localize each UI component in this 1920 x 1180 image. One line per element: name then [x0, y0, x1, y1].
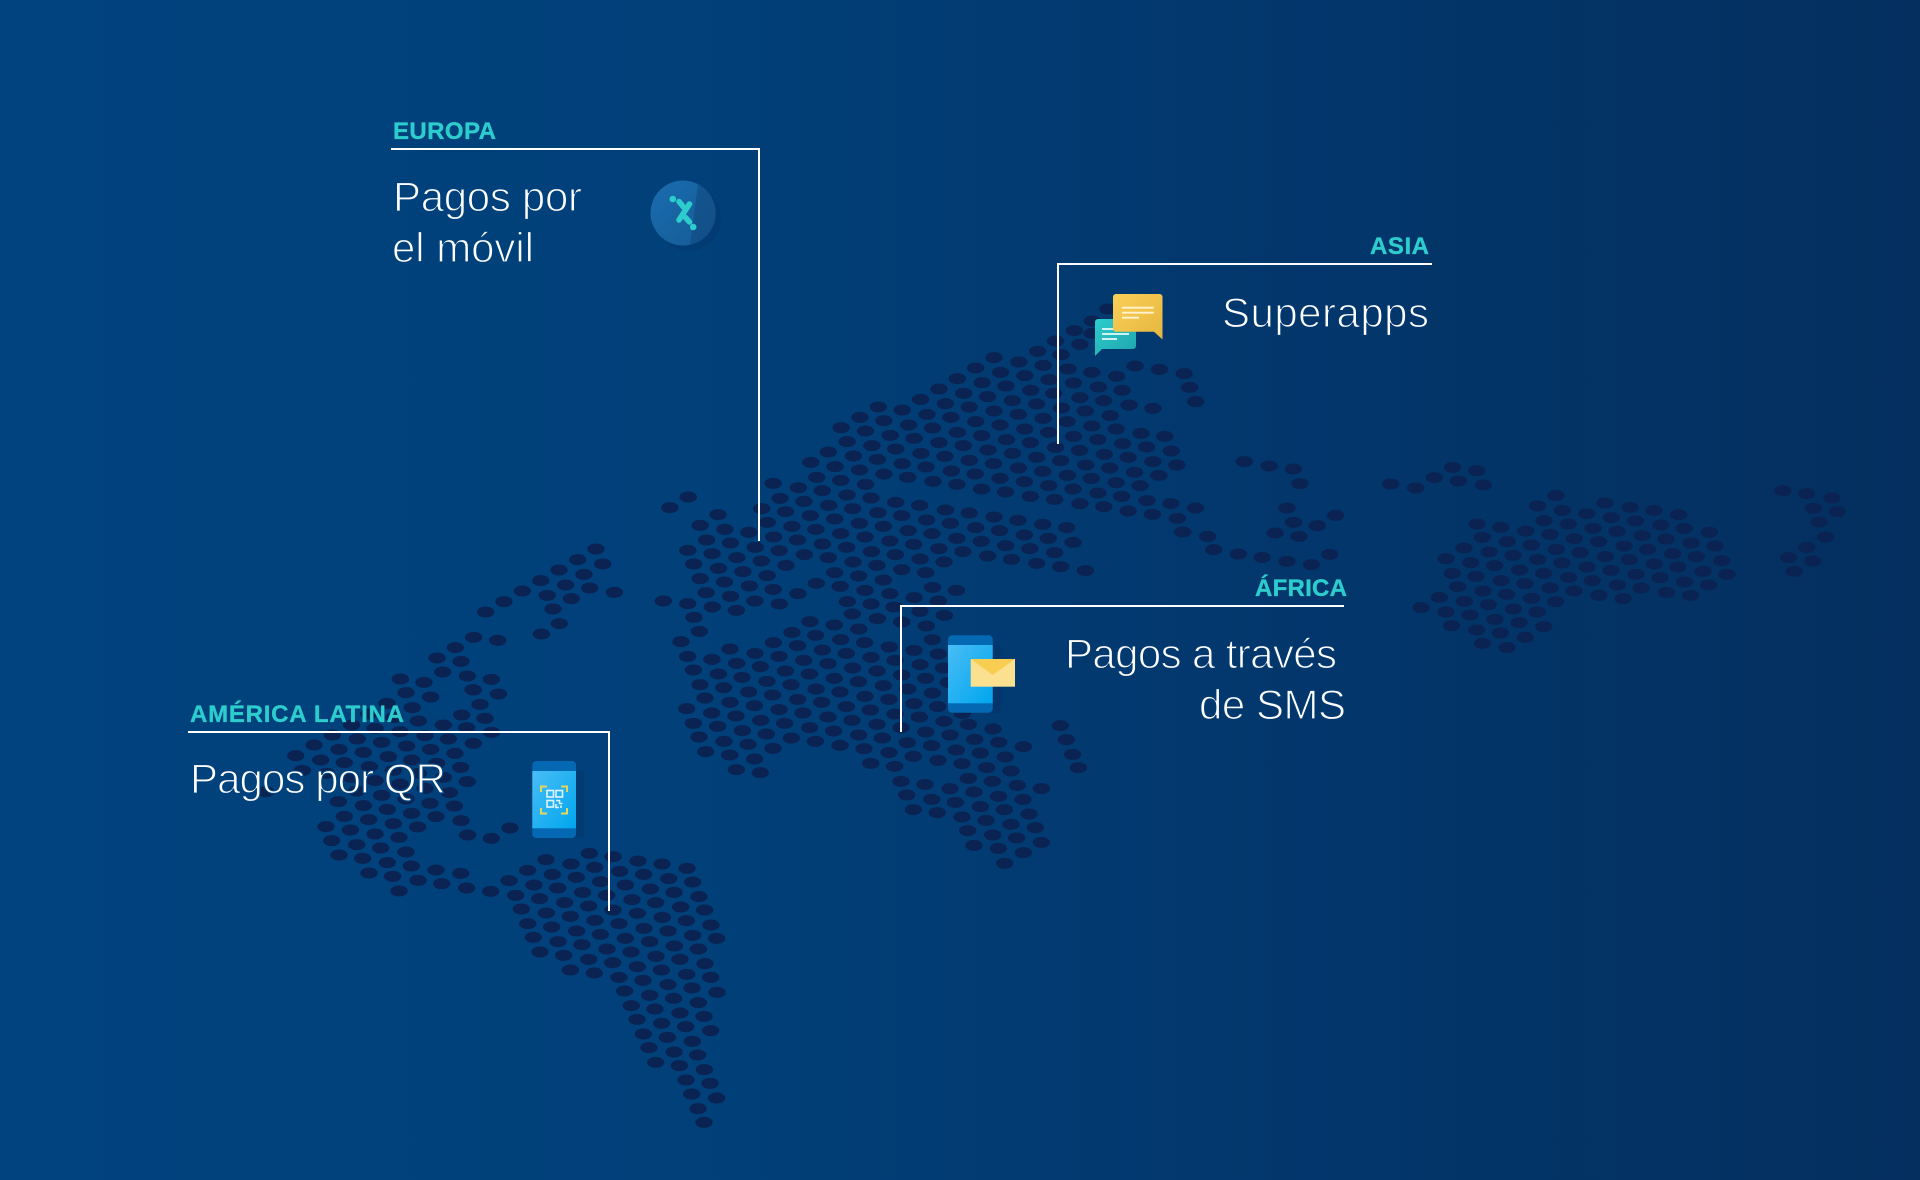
bracket line: América Latina [188, 732, 609, 911]
text: Pagos por QR: Pagos por QR [190, 755, 446, 802]
text: Pagos por el móvil: Pagos por [393, 173, 582, 220]
panel: Asia [1058, 233, 1432, 444]
icon: percent circle [650, 180, 721, 251]
heading: Europa: EUROPA [393, 118, 496, 145]
bracket line: Europa [391, 149, 759, 541]
bracket line: África [901, 606, 1344, 732]
text: Pagos a través de SMS: de SMS [1199, 681, 1346, 728]
dotted world map [266, 309, 1837, 1122]
dots: southern part of left continent [509, 853, 717, 1122]
dots: lower central continent [663, 601, 1078, 863]
icon: phone with QR code [532, 761, 584, 838]
heading: África: ÁFRICA [1255, 574, 1347, 602]
panel: África [901, 574, 1347, 732]
dots: right continent and islands [1391, 467, 1837, 648]
icon: phone with envelope [948, 635, 1015, 713]
heading: América Latina: AMÉRICA LATINA [190, 700, 404, 728]
text: Pagos por el móvil: el móvil [392, 224, 534, 271]
dots: central large continent [670, 309, 1336, 598]
text: Superapps: Superapps [1222, 289, 1429, 336]
panel: América Latina [188, 700, 609, 911]
text: Pagos por el móvil [392, 173, 582, 271]
dots: central part of left continent [266, 703, 510, 891]
text: Pagos a través de SMS [1065, 630, 1346, 728]
bracket line: Asia [1058, 264, 1432, 444]
panel: Europa [391, 118, 759, 541]
dots: northern tip of left continent [400, 549, 614, 697]
heading: Asia: ASIA [1370, 233, 1429, 260]
text: Pagos a través de SMS: Pagos a través [1065, 630, 1337, 677]
icon: chat bubbles [1095, 294, 1162, 356]
